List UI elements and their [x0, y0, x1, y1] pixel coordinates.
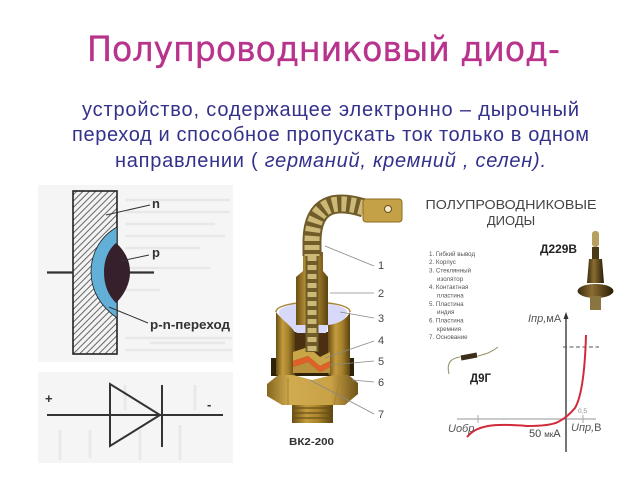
plus sign: +	[45, 391, 53, 406]
cathode bar	[161, 385, 163, 447]
label D229V: Д229В	[540, 244, 577, 256]
heading line 1: ПОЛУПРОВОДНИКОВЫЕ	[426, 197, 597, 212]
terminal lug	[363, 199, 402, 222]
p-n junction region	[91, 227, 117, 318]
definition line 2: переход и способное пропускать ток только в одном	[72, 124, 589, 146]
parts list: 1. Гибкий вывод	[429, 251, 475, 258]
conductor line	[47, 414, 223, 416]
icon: D229V diode	[578, 231, 614, 310]
panel: diode symbol	[38, 372, 233, 463]
case rim	[276, 302, 350, 312]
hex nut base	[267, 372, 358, 405]
part number 1: 1	[378, 260, 384, 272]
lead wires	[47, 271, 154, 274]
flange	[271, 358, 354, 376]
parts list: изолятор	[437, 276, 464, 283]
symbol background	[38, 372, 233, 463]
part numbers	[378, 260, 384, 421]
definition line 1: устройство, содержащее электронно – дырочный	[82, 99, 579, 121]
parts list: 3. Стеклянный	[429, 268, 472, 274]
device label: ВК2-200	[289, 436, 334, 448]
icon: D9G diode	[448, 347, 498, 374]
dashed limit line	[563, 346, 599, 348]
panel: semiconductor diodes	[426, 197, 614, 452]
parts list: кремния	[437, 326, 461, 333]
parts list	[429, 251, 475, 341]
label 0.5: 0,5	[578, 408, 587, 415]
parts list: индия	[437, 309, 454, 316]
part number 3: 3	[378, 313, 384, 325]
vertical axis	[565, 318, 567, 452]
panel heading	[426, 197, 597, 228]
parts list: 6. Пластина	[429, 318, 464, 324]
label p-n junction: p-n-переход	[150, 318, 230, 332]
glass insulator	[279, 303, 347, 333]
title: Полупроводниковый диод-	[87, 30, 560, 70]
chart: current-voltage curve	[448, 312, 602, 452]
central sleeve	[296, 252, 328, 325]
part number 4: 4	[378, 335, 384, 347]
indium plate	[293, 356, 330, 372]
triangle	[110, 384, 160, 446]
parts list: 2. Корпус	[429, 259, 456, 266]
definition text	[72, 99, 589, 172]
axis arrowhead	[564, 312, 568, 319]
threaded stud	[292, 402, 333, 423]
part number 5: 5	[378, 356, 384, 368]
label reverse voltage: Uобр	[448, 423, 474, 435]
p region lens	[104, 243, 130, 303]
parts list: 4. Контактная	[429, 284, 468, 291]
label n: n	[152, 196, 160, 211]
silicon plate	[293, 362, 330, 373]
drawing of the device	[267, 199, 402, 423]
leader lines	[106, 205, 150, 323]
illustration: VK2-200 diode cutaway	[267, 199, 402, 448]
label forward current: Iпр,мА	[528, 313, 562, 325]
panel background	[38, 185, 233, 362]
case wall right	[328, 312, 350, 375]
definition line 3: направлении ( германий, кремний , селен).	[115, 150, 546, 172]
label forward voltage: Uпр,В	[571, 422, 602, 434]
part number 2: 2	[378, 288, 384, 300]
panel: diode structure	[38, 185, 233, 362]
flexible lead lower	[306, 256, 318, 352]
case wall left	[276, 312, 295, 375]
parts list: 7. Основание	[429, 334, 468, 341]
minus sign: -	[207, 397, 211, 412]
red curve	[467, 335, 586, 437]
axis ticks	[478, 415, 583, 423]
leader lines	[310, 246, 374, 414]
part number 7: 7	[378, 409, 384, 421]
label 50 microamps: 50 мкА	[529, 428, 561, 440]
part number 6: 6	[378, 377, 384, 389]
horizontal axis	[457, 418, 596, 420]
flexible lead top	[312, 204, 364, 256]
parts list: 5. Пластина	[429, 301, 464, 308]
label p: p	[152, 245, 160, 260]
contact plate	[293, 347, 330, 366]
heading line 2: ДИОДЫ	[487, 213, 535, 228]
hatched semiconductor body	[73, 191, 117, 354]
label D9G: Д9Г	[470, 373, 491, 385]
parts list: пластина	[437, 292, 464, 300]
case interior	[293, 332, 330, 372]
